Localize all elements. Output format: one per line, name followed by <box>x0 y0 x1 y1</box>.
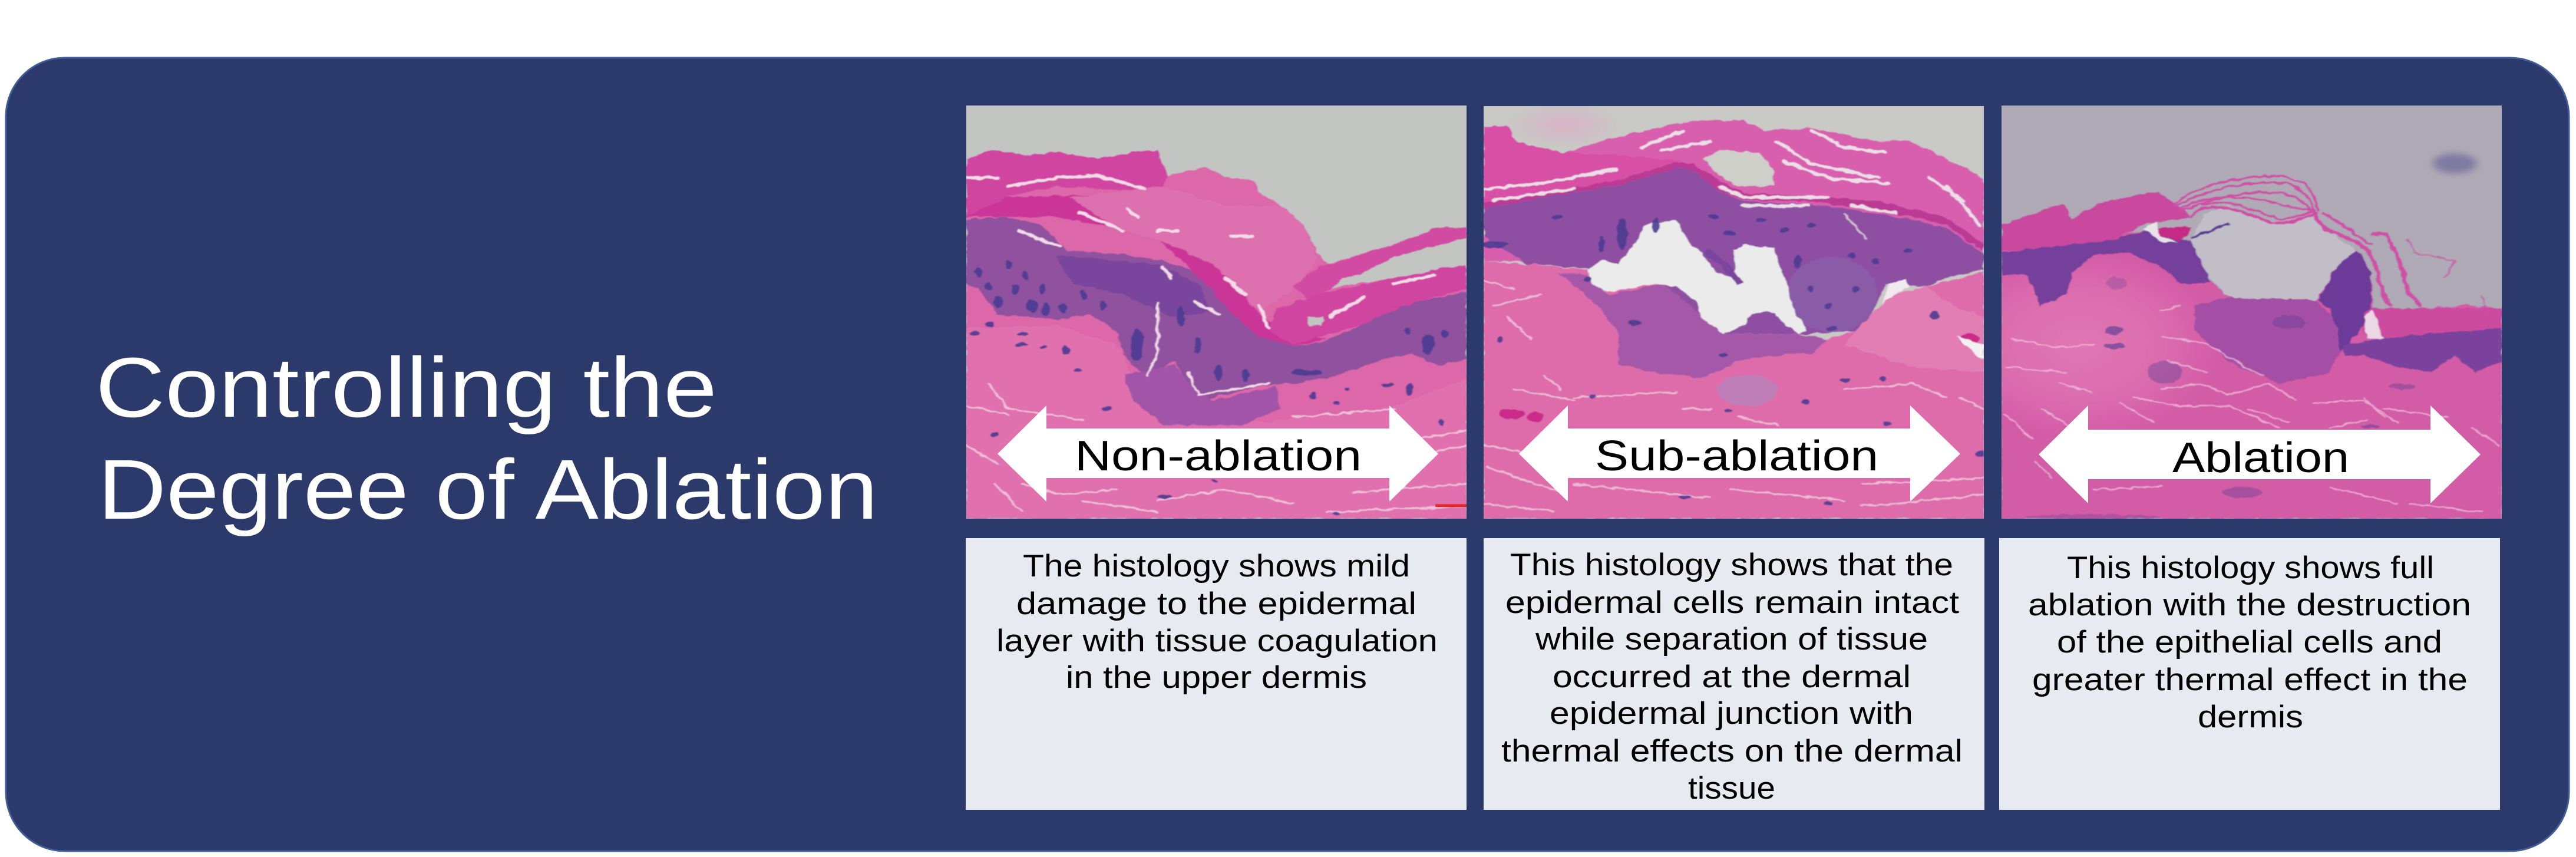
text block: non-ablation description: damage to the epidermal <box>1016 586 1416 621</box>
arrow: ablation label <box>2039 406 2481 503</box>
text block: sub-ablation description <box>1484 538 1984 810</box>
text block: sub-ablation description: thermal effects on the dermal <box>1501 734 1963 769</box>
cavity <box>1588 220 1808 334</box>
title: Degree of Ablation <box>98 442 878 537</box>
arrow: sub-ablation label <box>1519 406 1960 502</box>
text block: ablation description: greater thermal effect in the <box>2032 662 2468 697</box>
text block: ablation description: of the epithelial cells and <box>2057 625 2442 660</box>
arrow: sub-ablation label: Sub-ablation <box>1595 433 1878 480</box>
panel: non-ablation histology image <box>966 106 1467 519</box>
text block: ablation description: This histology shows full <box>2067 551 2434 585</box>
text block: ablation description <box>1999 538 2500 810</box>
text block: sub-ablation description: while separation of tissue <box>1535 622 1928 657</box>
text block: ablation description: ablation with the destruction <box>2028 588 2471 622</box>
arrow: non-ablation label: Non-ablation <box>1075 433 1362 480</box>
arrow: ablation label: Ablation <box>2172 434 2349 482</box>
text block: sub-ablation description: occurred at the dermal <box>1553 660 1911 694</box>
text block: sub-ablation description: epidermal junction with <box>1550 696 1913 731</box>
scale bar <box>1435 504 1467 507</box>
panel: sub-ablation histology image <box>1484 106 1984 519</box>
text block: non-ablation description: layer with tissue coagulation <box>996 624 1438 658</box>
title <box>95 340 878 537</box>
vessel <box>1716 375 1778 406</box>
text block: sub-ablation description: epidermal cells remain intact <box>1505 585 1959 620</box>
text block: non-ablation description <box>966 538 1467 810</box>
text block: ablation description: dermis <box>2198 700 2303 734</box>
arrow: non-ablation label <box>998 406 1438 502</box>
text block: non-ablation description: in the upper dermis <box>1066 660 1367 695</box>
title: Controlling the <box>95 340 717 435</box>
text block: sub-ablation description: tissue <box>1688 771 1775 806</box>
text block: non-ablation description: The histology shows mild <box>1023 549 1410 584</box>
panel: ablation histology image <box>2002 106 2502 519</box>
text block: sub-ablation description: This histology shows that the <box>1510 548 1953 582</box>
